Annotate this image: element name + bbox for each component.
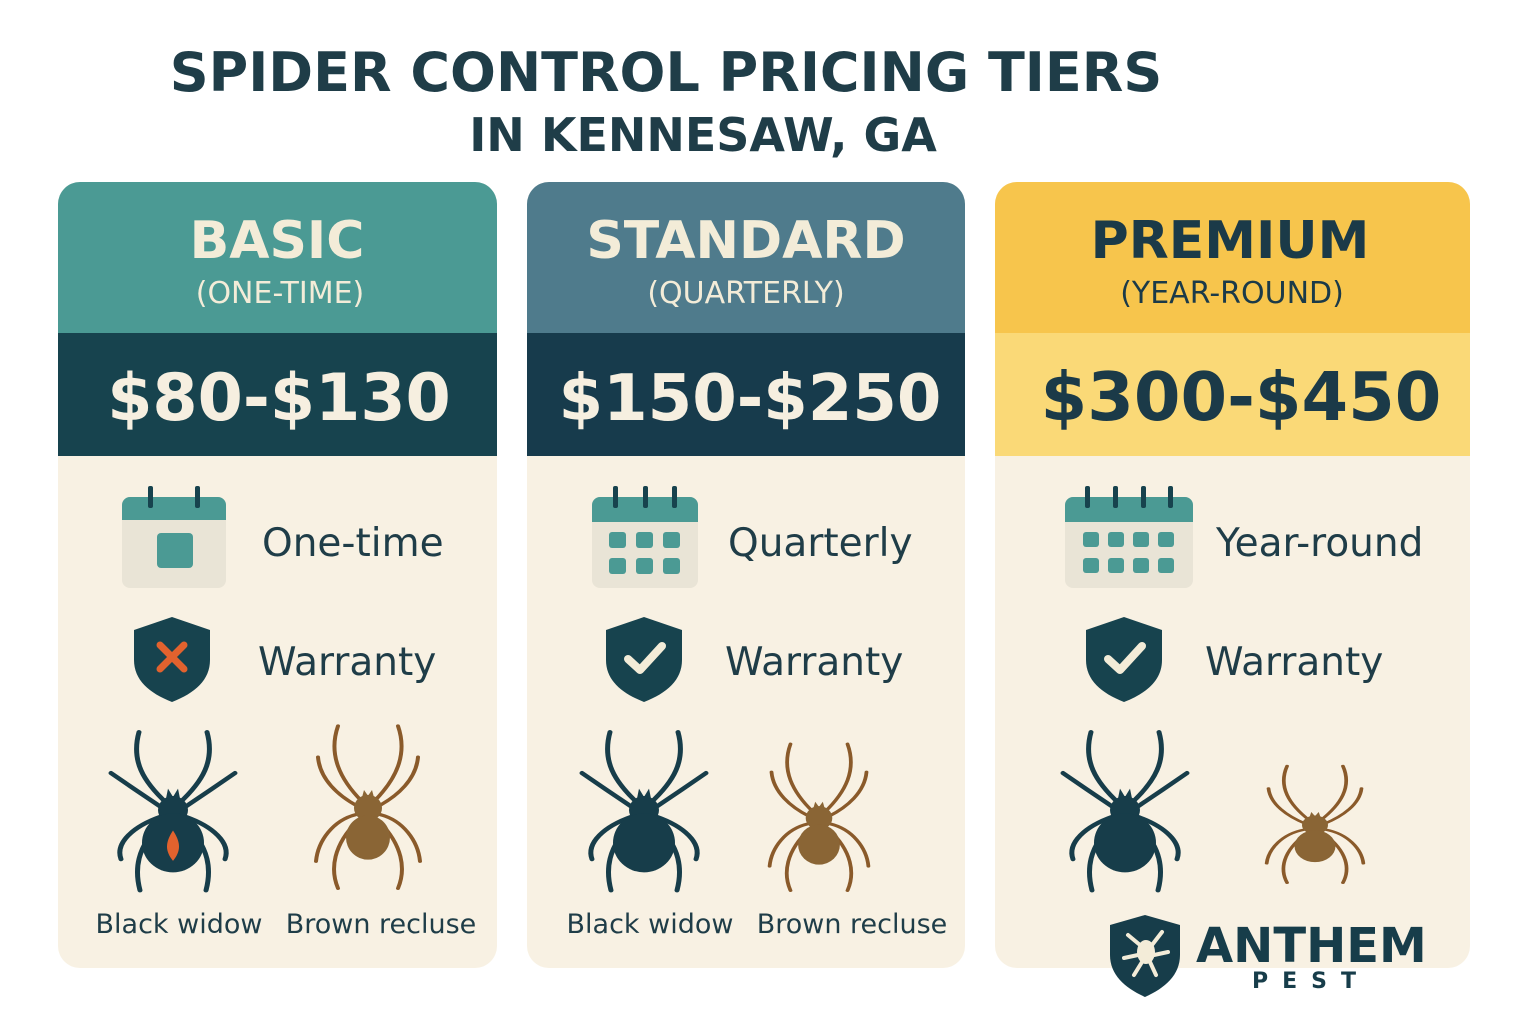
heading: premium bbox=[1091, 211, 1369, 311]
title: SPIDER CONTROL PRICING TIERS bbox=[170, 41, 1162, 104]
icon: black widow bbox=[582, 732, 706, 890]
text: quarterly: Quarterly bbox=[728, 521, 913, 566]
text: warranty: Warranty bbox=[258, 640, 436, 685]
heading: standard: STANDARD bbox=[586, 211, 906, 271]
icon: calendar one-time bbox=[122, 486, 226, 588]
labels: spiders: Black widow bbox=[567, 909, 733, 940]
text: one-time: One-time bbox=[262, 521, 444, 566]
labels: spiders: Black widow bbox=[96, 909, 262, 940]
text: warranty: Warranty bbox=[725, 640, 903, 685]
icon: black widow bbox=[111, 732, 235, 890]
price: basic: $80-$130 bbox=[107, 361, 451, 436]
icon: calendar quarterly bbox=[592, 486, 698, 588]
icon: shield check bbox=[606, 617, 682, 702]
heading: basic: (ONE-TIME) bbox=[196, 276, 364, 311]
icon: brown recluse bbox=[1267, 766, 1363, 883]
icon: black widow bbox=[1063, 732, 1187, 890]
text: warranty: Warranty bbox=[1205, 640, 1383, 685]
logo: anthem pest: ANTHEM bbox=[1196, 918, 1427, 974]
text: year-round: Year-round bbox=[1215, 521, 1423, 566]
heading: premium: (YEAR-ROUND) bbox=[1120, 276, 1344, 311]
labels: spiders bbox=[96, 909, 476, 940]
heading: basic bbox=[190, 211, 364, 311]
labels: spiders bbox=[567, 909, 947, 940]
title bbox=[170, 41, 1162, 162]
price: premium: $300-$450 bbox=[1041, 358, 1441, 436]
logo: anthem pest: PEST bbox=[1252, 969, 1370, 994]
title: IN KENNESAW, GA bbox=[469, 108, 937, 162]
icon: brown recluse bbox=[316, 726, 420, 888]
panel: premium bbox=[995, 182, 1470, 968]
icon: shield x bbox=[134, 617, 210, 702]
icon: calendar year-round bbox=[1065, 486, 1193, 588]
labels: spiders: Brown recluse bbox=[757, 909, 947, 940]
heading: basic: BASIC bbox=[190, 211, 364, 271]
logo: anthem pest bbox=[1110, 915, 1427, 997]
icon: brown recluse bbox=[770, 744, 868, 891]
price: standard: $150-$250 bbox=[559, 362, 941, 436]
heading: standard: (QUARTERLY) bbox=[647, 276, 845, 311]
panel: basic bbox=[58, 182, 497, 968]
labels: spiders: Brown recluse bbox=[286, 909, 476, 940]
heading: premium: PREMIUM bbox=[1091, 211, 1369, 271]
icon: shield check bbox=[1086, 617, 1162, 702]
panel: standard bbox=[527, 182, 965, 968]
heading: standard bbox=[586, 211, 906, 311]
